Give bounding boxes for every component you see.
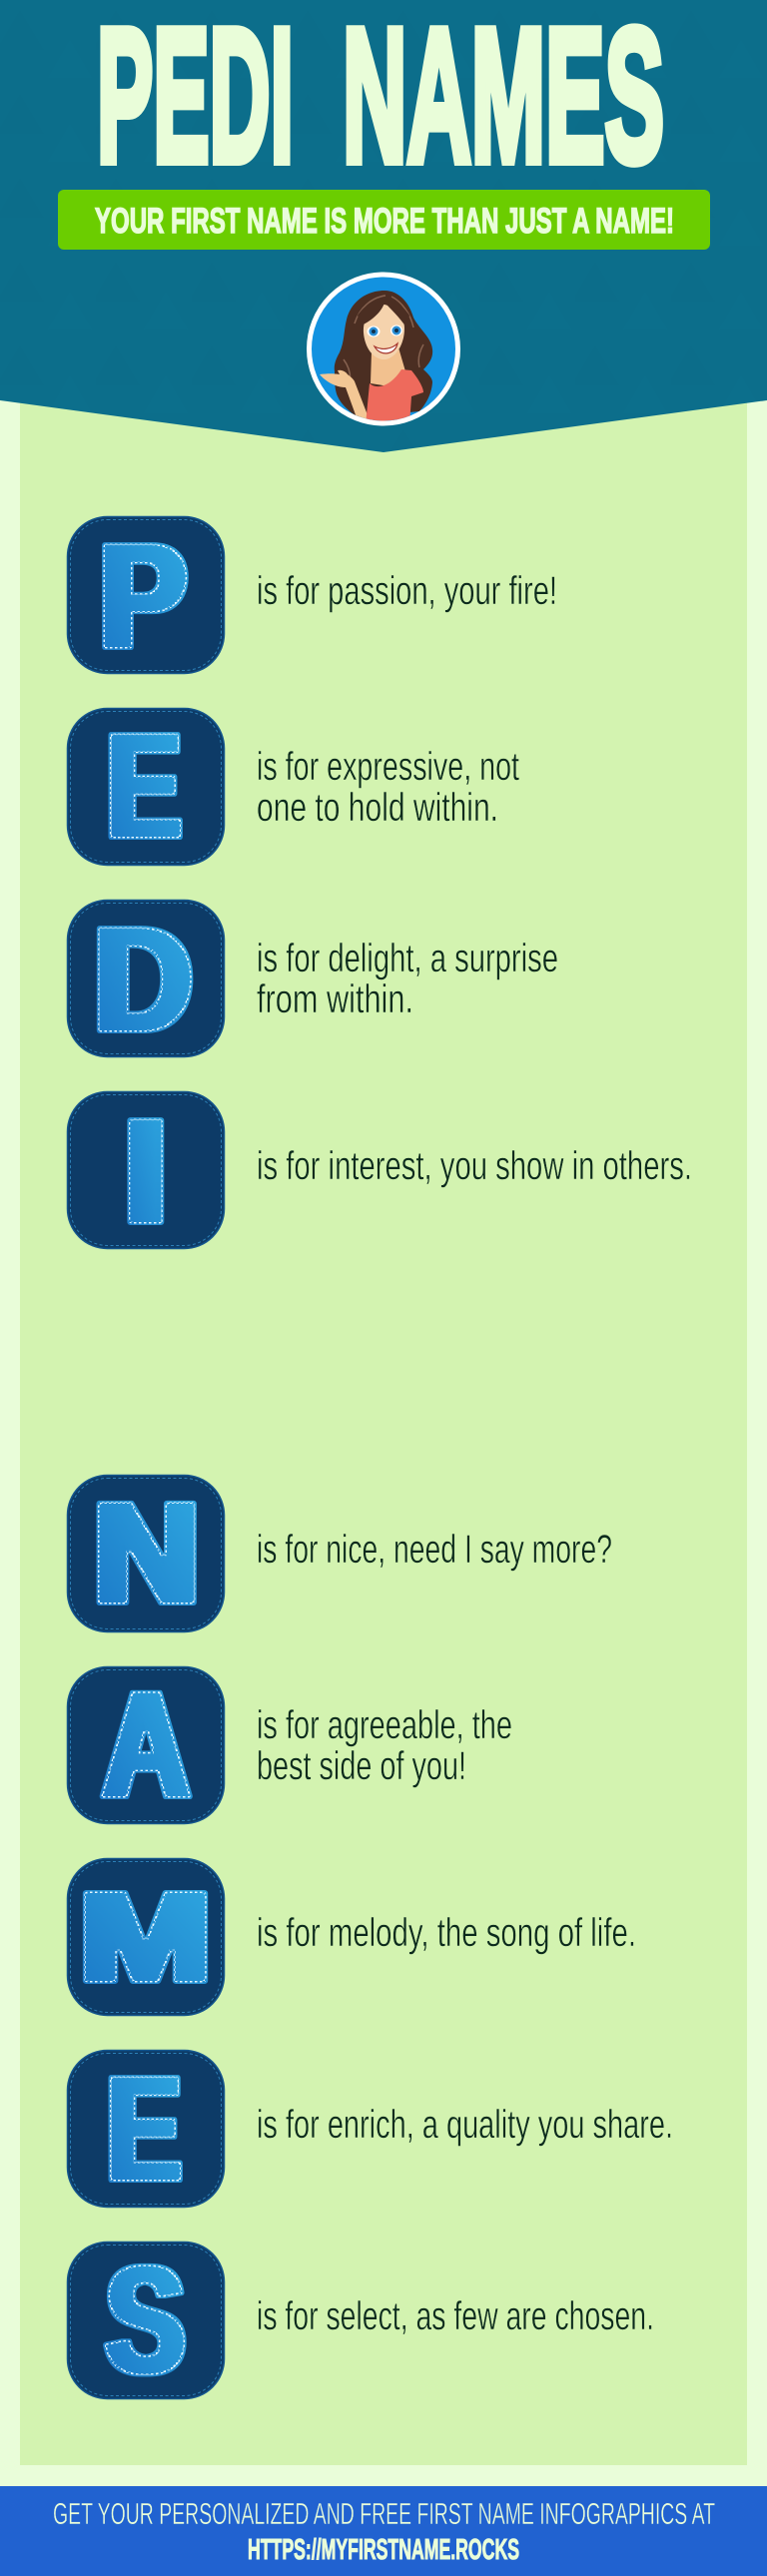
icon: letter D: D (94, 898, 192, 1062)
row: P (68, 514, 557, 679)
icon: letter N (68, 1473, 224, 1633)
icon: letter M: M (80, 1866, 211, 2009)
text: A lines: is for agreeable, the (257, 1703, 512, 1747)
text: D lines (257, 937, 558, 1021)
footer link: HTTPS://MYFIRSTNAME.ROCKS (248, 2534, 519, 2566)
icon: letter E (68, 704, 224, 869)
icon: letter A: A (103, 1660, 190, 1828)
row: E (68, 704, 519, 869)
icon: letter N: N (94, 1473, 200, 1633)
text: D lines: is for delight, a surprise (257, 937, 558, 980)
icon: letter E: E (107, 2047, 181, 2212)
icon: avatar woman in circle (310, 275, 457, 425)
icon: letter E (68, 2047, 224, 2212)
panel: letters background (20, 379, 747, 2465)
text: D lines: from within. (257, 977, 413, 1021)
icon: letter I: I (124, 1089, 168, 1254)
row: N (68, 1473, 612, 1633)
icon: letter D (68, 898, 224, 1062)
text: A lines: best side of you! (257, 1744, 466, 1788)
row: I (68, 1089, 692, 1254)
icon: letter E: E (107, 704, 181, 869)
row: M (68, 1859, 636, 2015)
tagline bar (58, 190, 710, 250)
text: N line: is for nice, need I say more? (257, 1528, 612, 1572)
icon: letter S: S (106, 2236, 185, 2405)
icon: letter P: P (100, 514, 187, 679)
row: A (68, 1660, 512, 1828)
row: S (68, 2236, 654, 2405)
icon: letter I (68, 1089, 224, 1254)
text: P line: is for passion, your fire! (257, 569, 557, 613)
icon: letter M (68, 1859, 224, 2015)
row: E (second) (68, 2047, 673, 2212)
icon: letter P (68, 514, 224, 679)
icon: letter A (68, 1660, 224, 1828)
icon: letter S (68, 2236, 224, 2405)
text: M line: is for melody, the song of life. (257, 1911, 636, 1955)
text: A lines (257, 1703, 512, 1788)
text: E lines (257, 745, 519, 830)
row: D (68, 898, 558, 1062)
text: E lines: is for expressive, not (257, 745, 519, 789)
footer (0, 2486, 767, 2576)
text: E lines: one to hold within. (257, 786, 498, 830)
header banner (0, 0, 767, 452)
